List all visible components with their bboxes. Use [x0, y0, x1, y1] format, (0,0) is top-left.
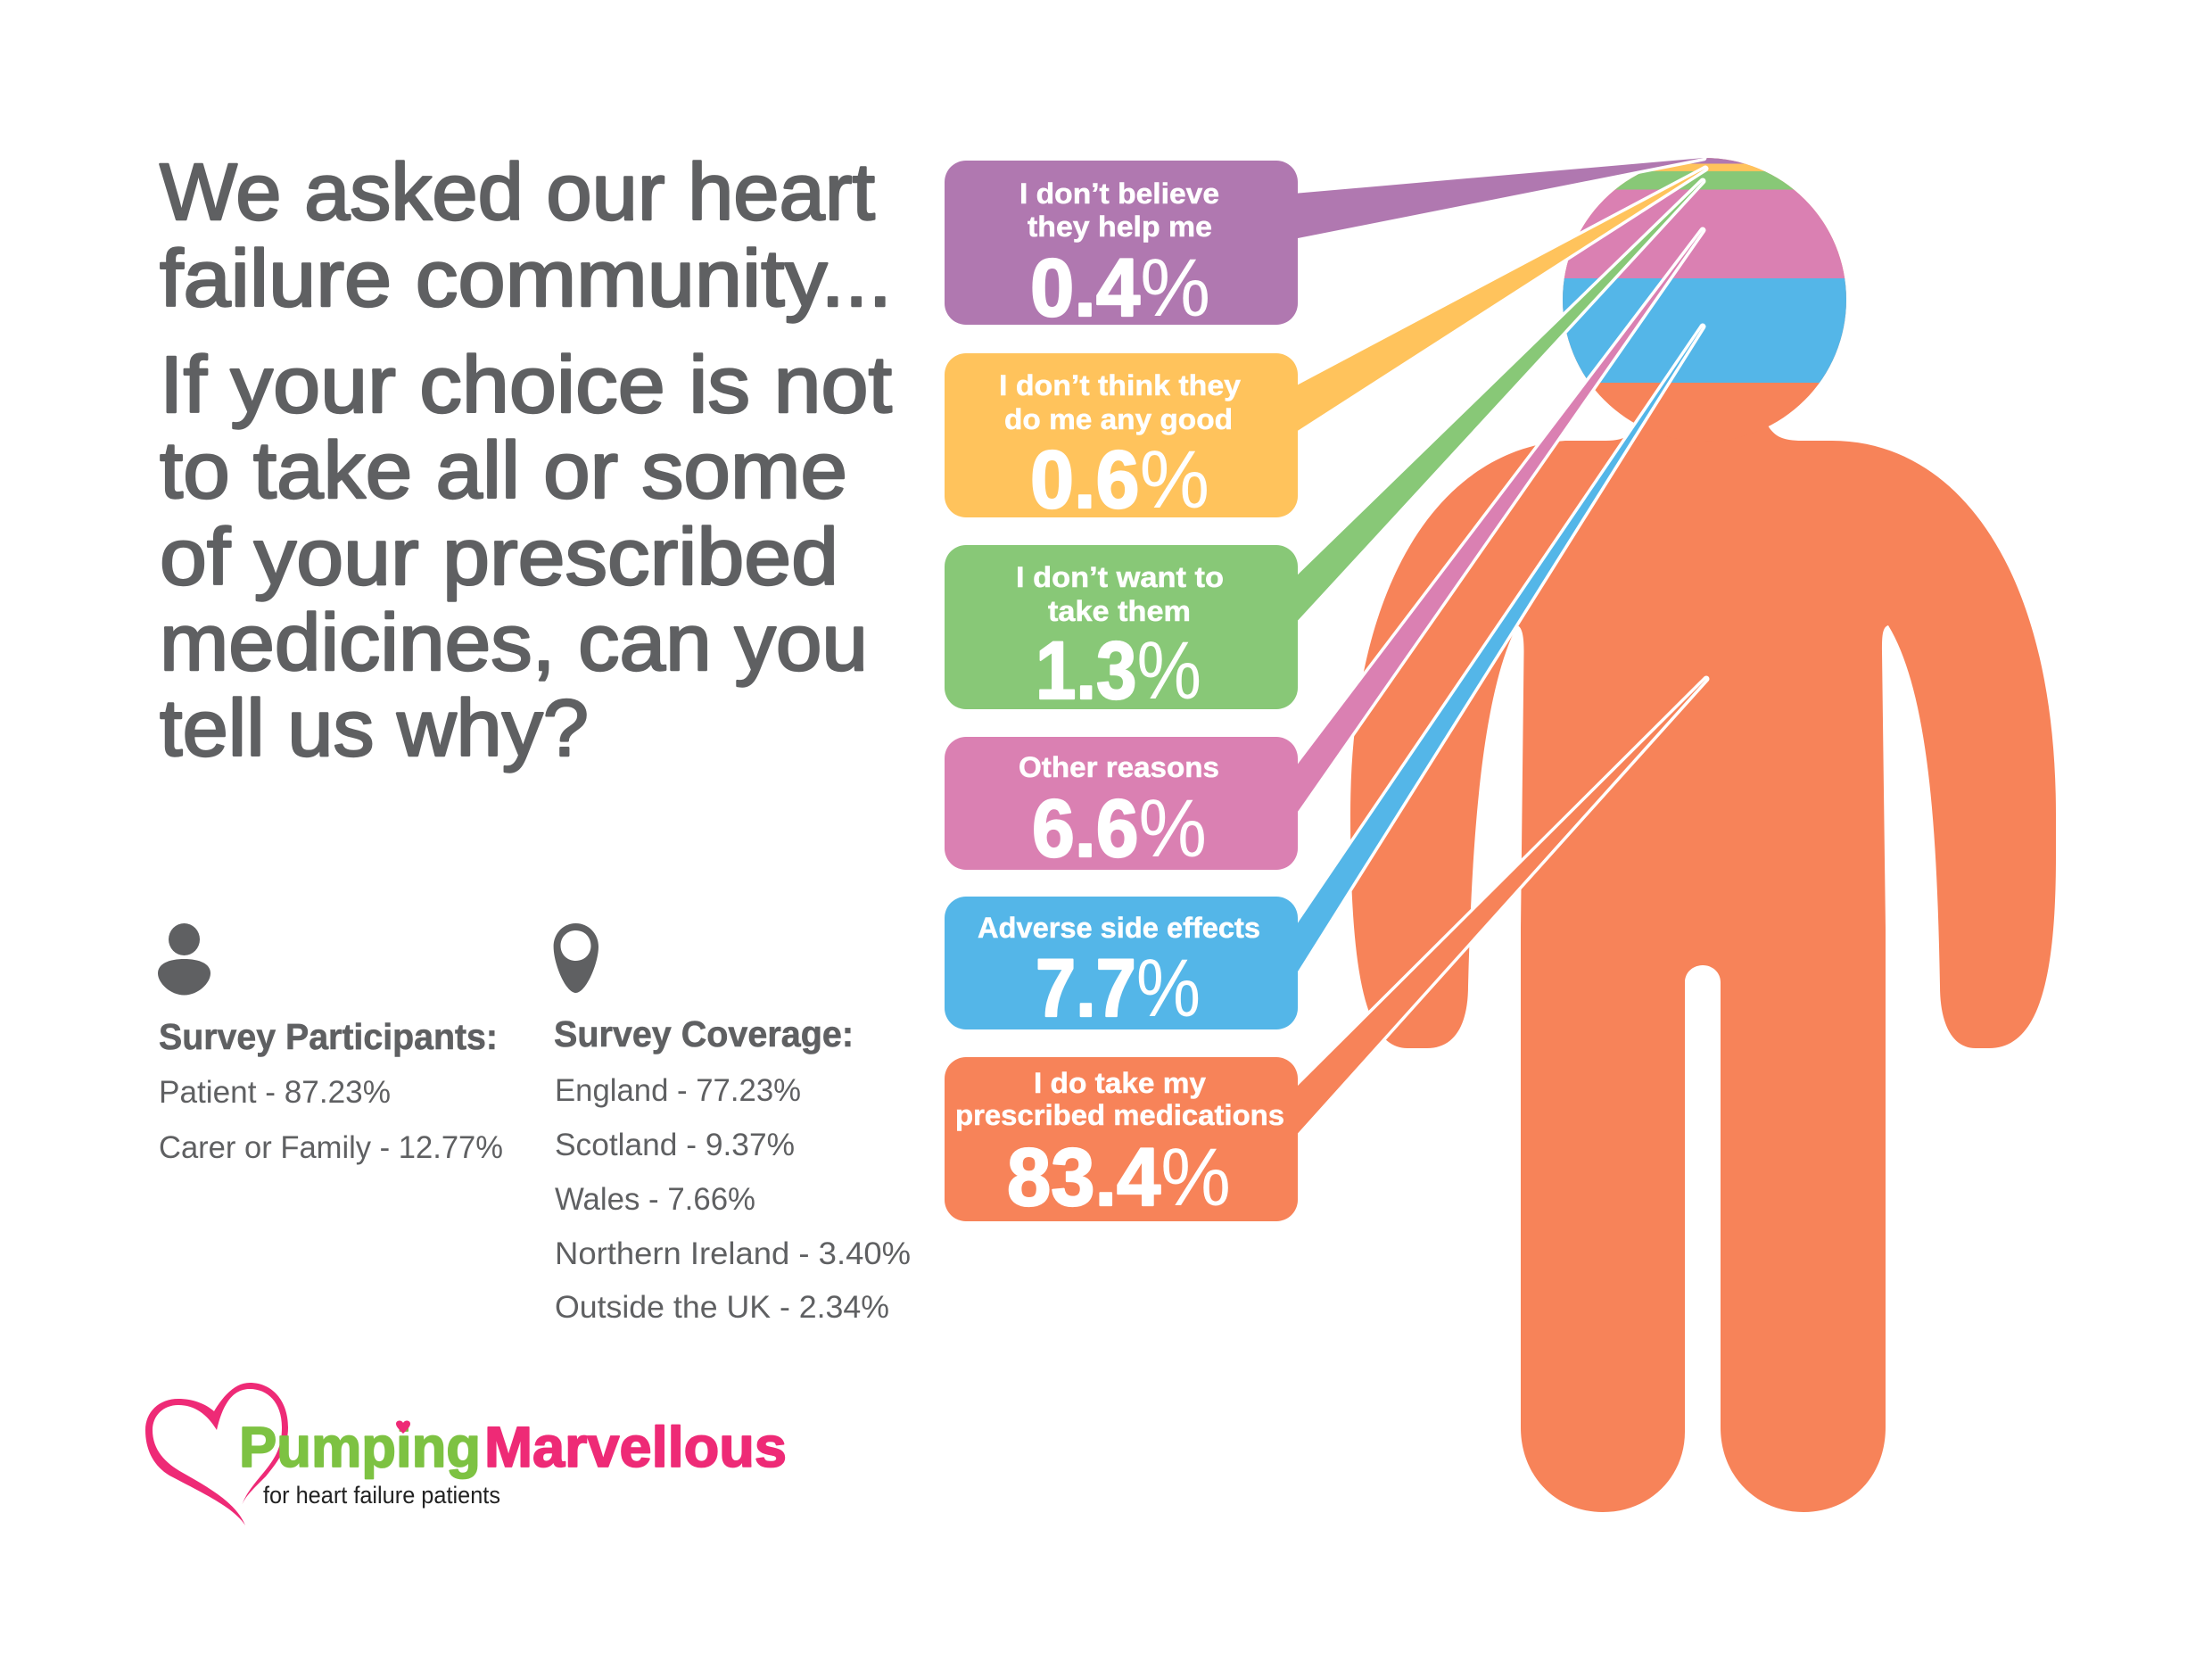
box [945, 1057, 1298, 1221]
label [999, 369, 1241, 435]
question text: medicines, can you [160, 599, 868, 688]
question text: to take all or some [160, 426, 847, 516]
heading [160, 148, 892, 324]
question text: If your choice is not [160, 341, 892, 430]
question text [160, 341, 892, 773]
value: 7.7% [1036, 943, 1201, 1034]
arrow: pink pointer [1293, 230, 1703, 818]
callout: Adverse side effects [945, 327, 1703, 1034]
label: I don’t want to [1016, 561, 1224, 593]
arrow: green pointer [1293, 181, 1703, 625]
participants list: Carer or Family - 12.77% [159, 1130, 503, 1165]
coverage list: Scotland - 9.37% [555, 1128, 795, 1162]
coverage list: Northern Ireland - 3.40% [555, 1236, 911, 1271]
icon: person [158, 923, 210, 996]
box [945, 897, 1298, 1029]
label: I don’t believe [1019, 178, 1219, 210]
callout: I do take my prescribed medications [945, 679, 1706, 1223]
label: I do take my [1034, 1067, 1206, 1099]
callout: Other reasons [945, 230, 1703, 874]
question text: tell us why? [160, 684, 589, 773]
arrow: orange pointer [1293, 679, 1706, 1138]
label [955, 1067, 1284, 1131]
logo heart dot [396, 1420, 410, 1434]
coverage list: England - 77.23% [555, 1073, 801, 1108]
value: 0.6% [1030, 434, 1209, 525]
logo wordmark: Pumping: Pumping [239, 1415, 481, 1479]
callout: I don't think they do me any good [945, 169, 1705, 525]
label: do me any good [1004, 403, 1233, 435]
box [945, 545, 1298, 709]
label: I don’t think they [999, 369, 1241, 401]
heading: failure community... [160, 235, 892, 324]
label: prescribed medications [955, 1099, 1284, 1131]
label [1016, 561, 1224, 627]
coverage list: Outside the UK - 2.34% [555, 1290, 889, 1325]
arrow: blue pointer [1293, 327, 1703, 979]
value: 6.6% [1032, 783, 1207, 874]
heading: survey participants: Survey Participants: [159, 1016, 498, 1057]
heading: survey coverage: Survey Coverage: [554, 1013, 854, 1054]
question text: of your prescribed [160, 513, 838, 602]
value: 83.4% [1007, 1132, 1231, 1223]
label: they help me [1028, 211, 1212, 243]
value: 0.4% [1030, 243, 1210, 334]
label [1019, 178, 1219, 243]
coverage list: Wales - 7.66% [555, 1182, 755, 1217]
panel: survey participants [158, 923, 503, 1165]
arrow: purple pointer [1293, 158, 1704, 239]
icon: location pin [554, 923, 598, 993]
coverage list [555, 1073, 911, 1325]
icon: heart outline [145, 1383, 288, 1525]
box [945, 353, 1298, 517]
logo tagline: for heart failure patients [263, 1482, 500, 1509]
label: Adverse side effects [978, 912, 1260, 944]
callout: I don't want to take them [945, 181, 1703, 716]
callout: I don't believe they help me [945, 158, 1704, 334]
logo: Pumping Marvellous [145, 1383, 787, 1525]
figure: human silhouette with stacked percentages [1350, 152, 2056, 1512]
body [1350, 425, 2056, 1512]
logo wordmark: Marvellous: Marvellous [484, 1415, 787, 1479]
label: take them [1048, 595, 1191, 627]
arrow: yellow pointer [1293, 169, 1705, 434]
heading: We asked our heart [160, 148, 875, 237]
head with coloured bands [1563, 158, 1846, 426]
box [945, 161, 1298, 325]
title: heading and question [160, 148, 892, 773]
participants list [159, 1075, 503, 1165]
value: 1.3% [1036, 625, 1201, 716]
label: Other reasons [1019, 751, 1219, 783]
panel: survey coverage [554, 923, 911, 1325]
participants list: Patient - 87.23% [159, 1075, 391, 1110]
box [945, 737, 1298, 870]
